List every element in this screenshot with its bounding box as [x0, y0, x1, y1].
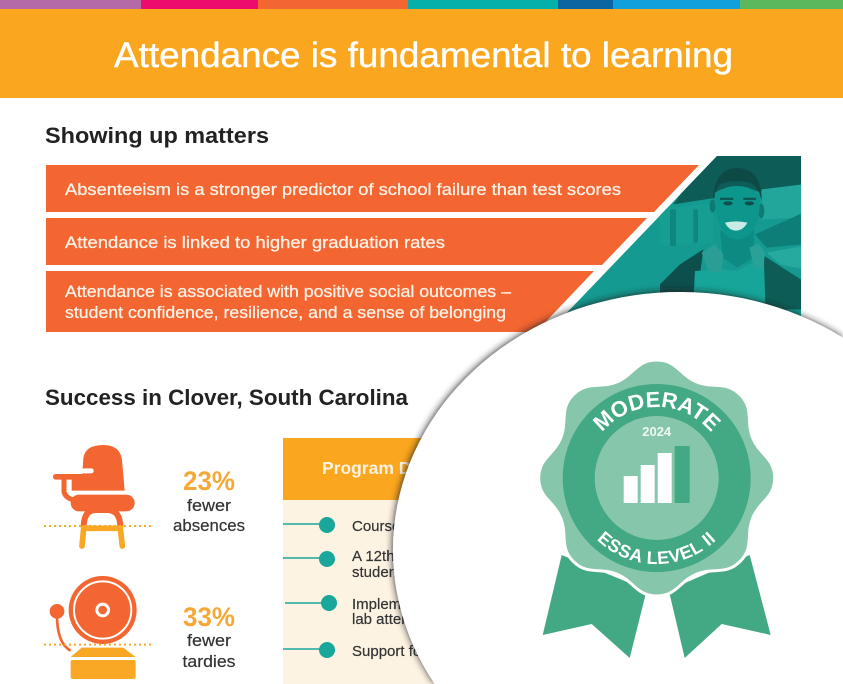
headphones: [749, 243, 765, 269]
rainbow colour strip: [0, 0, 843, 9]
jacket left: [660, 250, 704, 293]
ribbon: right tail: [669, 555, 771, 658]
title: Attendance is fundamental to learning: [114, 36, 733, 75]
jacket right: [762, 254, 803, 309]
stat: 23% fewer absences: fewer: [187, 497, 232, 515]
stat: 33% fewer tardies: 33%: [183, 602, 235, 632]
eyes and brows: [720, 198, 733, 200]
panel: program details table: [283, 438, 583, 684]
stat: 23% fewer absences: 23%: [183, 466, 235, 496]
photo: smiling student in teal duotone: [566, 156, 801, 316]
heading: success in Clover: Success in Clover, South Carolina: [45, 385, 409, 410]
magnifying circle overlay: [393, 292, 843, 684]
smile: [725, 221, 747, 231]
list item 4: Support for: [352, 643, 426, 660]
bar chart icon: [624, 446, 690, 503]
arc label: moderate: MODERATE: [592, 392, 722, 432]
reason bar 1: [46, 165, 699, 212]
list item 2: student: [352, 564, 402, 581]
reason bar 3: Attendance is associated with positive social outcomes –: [65, 282, 512, 301]
stat: 33% fewer tardies: tardies: [182, 653, 236, 671]
face: [715, 186, 760, 239]
title banner: [0, 9, 843, 98]
reason bar 3: student confidence, resilience, and a sense of belonging: [65, 303, 506, 322]
hair: [713, 168, 762, 201]
ears: [710, 199, 716, 213]
table heading: Program Details: [322, 458, 456, 478]
icon: school bell: [44, 576, 153, 679]
scalloped seal: [539, 360, 775, 596]
neck: [720, 231, 754, 268]
list item 4: [283, 642, 426, 660]
stat: 23% fewer absences: absences: [173, 517, 245, 535]
list item 2: [283, 548, 402, 581]
t-shirt: [693, 263, 765, 303]
icon: school desk chair: [44, 445, 153, 546]
arc label: ESSA level II: ESSA LEVEL II: [598, 531, 716, 564]
inner disc: [595, 416, 719, 540]
heading: showing up matters: Showing up matters: [45, 123, 269, 148]
panel: reasons attendance matters: [46, 165, 699, 332]
stat: 23% fewer absences: [173, 466, 245, 535]
reason bar 3: [46, 271, 594, 332]
list item 3: [285, 595, 450, 628]
list item 3: Implement: [352, 596, 423, 613]
list item 1: Course: [352, 518, 400, 535]
list item 1: [283, 517, 400, 535]
list item 3: lab attendance: [352, 611, 450, 628]
ribbon: left tail: [543, 555, 647, 658]
year: 2024: [642, 424, 672, 439]
stat: 33% fewer tardies: fewer: [187, 632, 232, 650]
badge: moderate ESSA level II: [540, 362, 774, 658]
reason bar 2: Attendance is linked to higher graduation rates: [65, 233, 445, 252]
reason bar 1: Absenteeism is a stronger predictor of school failure than test scores: [65, 180, 621, 199]
collar: [702, 244, 723, 273]
reason bar 2: [46, 218, 647, 265]
list item 2: A 12th: [352, 548, 395, 565]
stat: 33% fewer tardies: [182, 602, 236, 671]
dark ring: [563, 384, 751, 572]
